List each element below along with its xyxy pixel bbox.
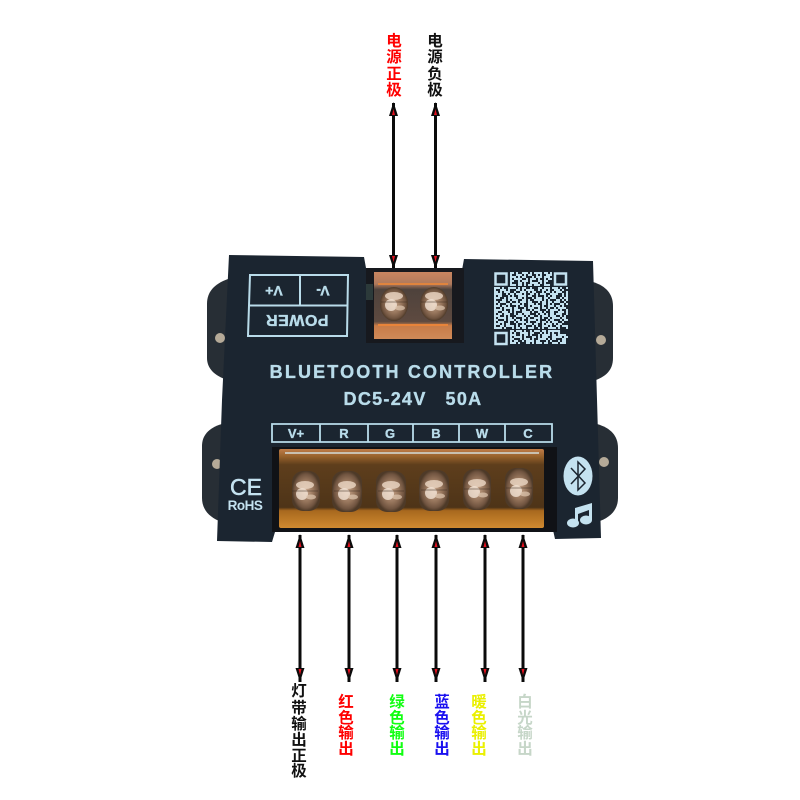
label: power negative: 负 bbox=[427, 65, 443, 83]
arrow: power negative bbox=[431, 102, 440, 269]
output channel labels: G bbox=[385, 426, 395, 441]
output channel labels: R bbox=[339, 426, 349, 441]
CE RoHS marks bbox=[228, 474, 263, 513]
output channel labels: B bbox=[431, 426, 441, 441]
arrow: strip positive bbox=[296, 534, 304, 682]
label: blue output bbox=[434, 693, 450, 758]
label: strip positive: 带 bbox=[291, 699, 307, 717]
label: red output: 出 bbox=[338, 740, 354, 758]
label: strip positive: 正 bbox=[291, 748, 307, 765]
output channel labels bbox=[272, 424, 552, 442]
label: white output bbox=[517, 693, 533, 758]
arrow: green output bbox=[392, 534, 402, 682]
label: warm output: 暖 bbox=[471, 693, 487, 711]
label: strip positive: 灯 bbox=[291, 682, 307, 700]
icon: bluetooth bbox=[564, 456, 592, 496]
label: warm output: 色 bbox=[471, 708, 487, 727]
label: green output: 绿 bbox=[389, 692, 405, 711]
label: white output: 白 bbox=[517, 693, 533, 711]
power label box: V+ bbox=[265, 283, 283, 299]
label: blue output: 输 bbox=[434, 723, 450, 742]
output channel labels: C bbox=[523, 426, 533, 441]
label: warm output bbox=[471, 693, 487, 758]
voltage and current rating: DC5-24V 50A bbox=[344, 389, 482, 409]
output terminal block bbox=[272, 447, 557, 532]
label: green output: 色 bbox=[389, 708, 405, 727]
product title: BLUETOOTH CONTROLLER bbox=[270, 362, 554, 382]
icon: music note bbox=[567, 503, 592, 528]
power label box: V- bbox=[316, 283, 330, 299]
label: power positive: 源 bbox=[386, 48, 402, 66]
label: warm output: 输 bbox=[471, 723, 487, 742]
label: power positive: 电 bbox=[386, 32, 402, 50]
QR code bbox=[494, 273, 568, 344]
label: power negative: 源 bbox=[427, 48, 443, 66]
label: warm output: 出 bbox=[471, 740, 487, 758]
arrow: red output bbox=[344, 534, 354, 682]
label: red output bbox=[338, 692, 354, 758]
label: red output: 红 bbox=[338, 692, 354, 711]
controller body bbox=[217, 255, 601, 542]
CE RoHS marks: CE bbox=[230, 474, 262, 500]
arrow: warm output bbox=[480, 534, 490, 682]
label: white output: 出 bbox=[517, 740, 533, 758]
label: blue output: 蓝 bbox=[434, 693, 450, 711]
label: power negative: 电 bbox=[427, 32, 443, 50]
mounting ears bbox=[202, 279, 618, 522]
label: red output: 输 bbox=[338, 723, 354, 742]
arrow: blue output bbox=[432, 534, 440, 682]
label: white output: 输 bbox=[517, 723, 533, 742]
CE RoHS marks: RoHS bbox=[228, 498, 263, 513]
label: green output: 出 bbox=[389, 740, 405, 758]
label: white output: 光 bbox=[517, 709, 533, 727]
label: green output: 输 bbox=[389, 723, 405, 742]
label: power negative bbox=[427, 32, 443, 99]
label: power positive bbox=[386, 32, 402, 99]
output channel labels: V+ bbox=[288, 426, 305, 441]
power terminal block bbox=[366, 268, 464, 343]
label: green output bbox=[389, 692, 405, 758]
label: blue output: 出 bbox=[434, 740, 450, 758]
power label box bbox=[248, 275, 348, 336]
output channel labels: W bbox=[476, 426, 489, 441]
label: strip positive: 出 bbox=[291, 731, 307, 749]
label: power negative: 极 bbox=[427, 81, 443, 99]
label: strip positive bbox=[291, 682, 307, 780]
label: blue output: 色 bbox=[434, 708, 450, 727]
arrow: white output bbox=[518, 534, 528, 682]
label: power positive: 极 bbox=[386, 81, 402, 99]
label: power positive: 正 bbox=[386, 66, 402, 83]
label: strip positive: 输 bbox=[291, 714, 307, 733]
label: strip positive: 极 bbox=[291, 762, 307, 780]
power label box: POWER bbox=[266, 311, 328, 328]
label: red output: 色 bbox=[338, 708, 354, 727]
arrow: power positive bbox=[389, 102, 398, 269]
